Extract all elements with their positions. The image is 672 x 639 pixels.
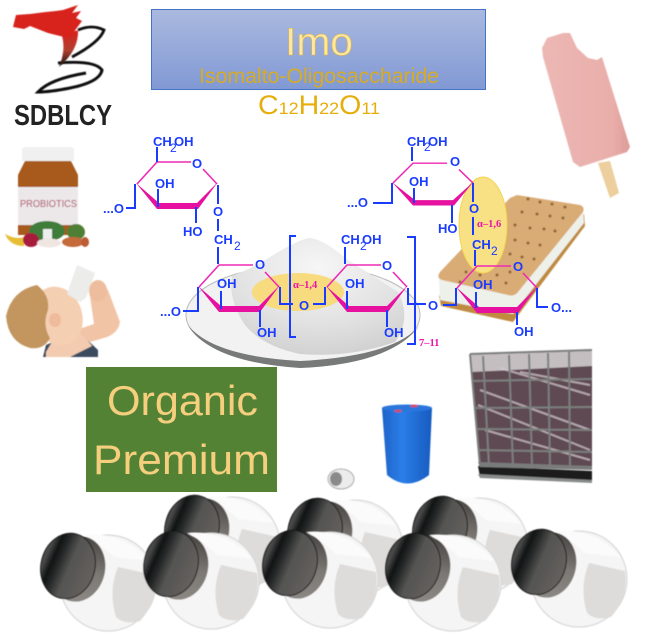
ring 2 labels: 2 bbox=[424, 140, 431, 154]
bottom cookie bbox=[439, 214, 585, 322]
image: popsicle bbox=[542, 33, 630, 198]
jars: back row bbox=[158, 489, 528, 596]
cap bbox=[22, 147, 74, 162]
bonds bbox=[126, 147, 548, 327]
title: Imo: Imo bbox=[285, 21, 353, 64]
dress bbox=[43, 331, 98, 357]
subtitle: Isomalto-Oligosaccharide bbox=[199, 65, 439, 88]
ring 2 labels: 2 bbox=[491, 244, 498, 258]
face bbox=[25, 280, 91, 352]
ring 3 labels: O bbox=[299, 298, 309, 313]
bar bbox=[542, 33, 630, 167]
jars: front row bbox=[34, 523, 627, 631]
ring 2 labels: O bbox=[469, 201, 479, 216]
chemical formula: C12H22O11 bbox=[258, 90, 380, 120]
hair bbox=[6, 285, 50, 348]
ring 4 labels bbox=[341, 232, 438, 340]
image: baby drinking bbox=[6, 265, 120, 357]
bond label: alpha-1,6: α–1,6 bbox=[477, 219, 501, 230]
ring 1 labels: OH bbox=[174, 134, 194, 149]
highlight: alpha-1,6 link bbox=[459, 177, 507, 273]
image: IBC tote on pallet bbox=[470, 350, 592, 483]
ring 1 labels bbox=[103, 134, 241, 253]
badge: Organic Premium bbox=[86, 367, 277, 492]
ring 3 labels: OH bbox=[257, 325, 276, 340]
hand bbox=[89, 280, 107, 302]
polymer brackets bbox=[290, 236, 415, 344]
logo: SDBLCY dragon bbox=[13, 5, 112, 132]
wrap highlights bbox=[478, 368, 590, 460]
ring 2 labels: O bbox=[450, 154, 460, 169]
pallet bbox=[478, 466, 592, 481]
ring 4 labels: OH bbox=[362, 232, 382, 247]
logo wordmark: SDBLCY bbox=[14, 100, 112, 132]
sugar rings bbox=[136, 162, 538, 313]
ring 2 labels: CH bbox=[407, 134, 426, 149]
highlight: alpha-1,4 link bbox=[252, 273, 344, 311]
ring 4 labels: O bbox=[382, 258, 392, 273]
label text: PROBIOTICS bbox=[20, 199, 77, 210]
ring 3 labels bbox=[160, 257, 309, 340]
image: ice cream sandwich bbox=[438, 195, 585, 322]
ring 4 labels: 2 bbox=[360, 239, 367, 253]
ring 4 labels: OH bbox=[384, 325, 404, 340]
jar bbox=[18, 161, 78, 235]
title panel bbox=[152, 10, 486, 90]
ring 5 labels: O bbox=[513, 259, 523, 274]
image: probiotics bottle bbox=[5, 147, 89, 248]
ring 1 labels: HO bbox=[183, 224, 202, 239]
image: small lid bbox=[328, 469, 354, 489]
ring 5 labels: O... bbox=[551, 300, 572, 315]
ring 2 labels bbox=[347, 134, 498, 258]
arm bbox=[76, 280, 120, 342]
foods bbox=[5, 221, 89, 248]
tote contents bbox=[470, 351, 592, 466]
ring 1 labels: 2 bbox=[234, 239, 241, 253]
bottle bbox=[67, 265, 95, 302]
ring 4 labels: O bbox=[428, 298, 438, 313]
icon: red dragon head bbox=[13, 5, 82, 67]
chest bbox=[46, 328, 92, 357]
icon: black letter B bbox=[38, 27, 104, 92]
image: blue barrel bbox=[382, 404, 432, 484]
badge line 1: Organic bbox=[107, 377, 258, 424]
ring 1 labels: O bbox=[213, 204, 223, 219]
powder bbox=[231, 238, 404, 355]
ring 3 labels: ...O bbox=[160, 304, 181, 319]
ring 1 labels: CH bbox=[214, 232, 233, 247]
label bbox=[18, 187, 78, 225]
top cookie bbox=[438, 195, 584, 296]
bowl bbox=[186, 265, 420, 365]
ring 2 labels: OH bbox=[409, 174, 428, 189]
filling bbox=[439, 208, 584, 314]
cookie holes bbox=[458, 198, 566, 284]
cage bbox=[470, 350, 592, 466]
ring 1 labels: OH bbox=[155, 176, 174, 191]
ring 3 labels: O bbox=[255, 257, 265, 272]
ring 5 labels: OH bbox=[514, 324, 534, 339]
ring 5 labels bbox=[473, 259, 572, 339]
ring 1 labels: ...O bbox=[103, 201, 124, 216]
ring 2 labels: CH bbox=[472, 237, 491, 252]
repeat count: 7–11 bbox=[419, 338, 439, 349]
ring 3 labels: OH bbox=[217, 276, 236, 291]
ring 2 labels: ...O bbox=[347, 195, 368, 210]
bond label: alpha-1,4: α–1,4 bbox=[293, 280, 318, 291]
image: powder bowl bbox=[186, 238, 420, 368]
ring 5 labels: OH bbox=[473, 277, 492, 292]
ring 2 labels: OH bbox=[428, 134, 448, 149]
molecular structure bbox=[103, 134, 572, 349]
ear bbox=[49, 313, 61, 327]
ring 4 labels: CH bbox=[341, 232, 360, 247]
stick bbox=[598, 161, 619, 198]
ring 2 labels: HO bbox=[438, 221, 458, 236]
ring 1 labels: O bbox=[192, 156, 202, 171]
badge line 2: Premium bbox=[93, 436, 270, 483]
ring 1 labels: 2 bbox=[170, 141, 177, 155]
ring 4 labels: OH bbox=[345, 276, 364, 291]
ring 1 labels: CH bbox=[153, 134, 172, 149]
